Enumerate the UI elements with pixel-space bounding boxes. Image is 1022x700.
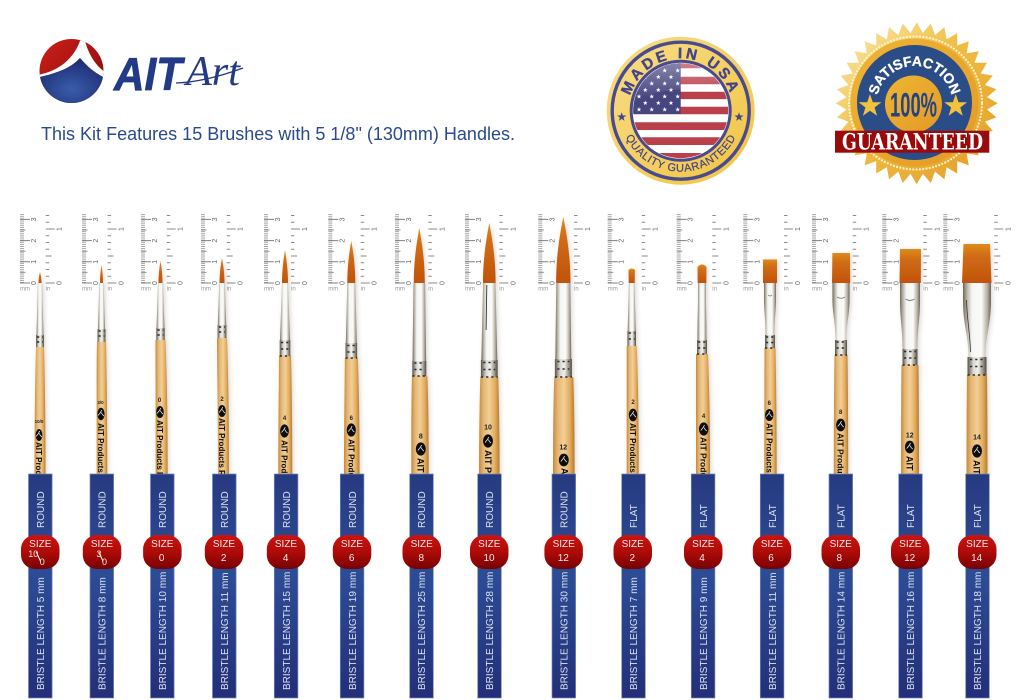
ruler 5: 10 bbox=[302, 227, 309, 285]
brush: flat 12: 12 bbox=[906, 432, 914, 440]
label strip 10: FLAT bbox=[629, 504, 640, 528]
label strip 13: FLAT bbox=[836, 504, 848, 528]
label strip 9: BRISTLE LENGTH 30 mm bbox=[560, 572, 570, 690]
label strip 1: BRISTLE LENGTH 5 mm bbox=[36, 577, 47, 690]
ruler 1: 10 bbox=[57, 227, 64, 285]
brush: round 10: 10 bbox=[484, 424, 492, 432]
label strip 13: 8 bbox=[837, 553, 843, 564]
label strip 1: 0 bbox=[40, 557, 45, 567]
badge text: 100%: 100% bbox=[890, 86, 937, 124]
ruler 3: 10 bbox=[178, 227, 185, 285]
badge text: guaranteed: GUARANTEED bbox=[842, 130, 983, 156]
brush: round 10: AIT Products Round bbox=[483, 450, 493, 537]
label strip 6: ROUND bbox=[348, 491, 359, 528]
ruler 4 bbox=[201, 213, 245, 292]
ruler 2: mm bbox=[82, 286, 92, 292]
brush: flat 14: 14 bbox=[973, 434, 981, 442]
ruler 9: 10 bbox=[585, 227, 592, 285]
label strip 11: BRISTLE LENGTH 9 mm bbox=[699, 577, 710, 690]
label strip 12: 6 bbox=[768, 553, 774, 564]
brush: flat 4: AIT Products Flat bbox=[698, 437, 708, 508]
label strip 6: 6 bbox=[349, 553, 355, 564]
ruler 10 bbox=[608, 213, 660, 292]
ruler 11: 3210 bbox=[688, 217, 695, 285]
label strip 2: SIZE bbox=[91, 539, 113, 550]
ruler 15: 10 bbox=[1005, 227, 1012, 285]
ruler 14: in bbox=[923, 286, 928, 292]
label strip 5: 4 bbox=[283, 553, 289, 564]
logo mark bbox=[40, 39, 104, 103]
label strip 8: 10 bbox=[483, 553, 495, 564]
ruler 4: 3210 bbox=[212, 217, 219, 285]
label strip 7: ROUND bbox=[417, 491, 428, 528]
brush: round 4 bbox=[278, 250, 292, 517]
label strip 3 bbox=[143, 474, 182, 698]
label strip 7: 8 bbox=[419, 553, 425, 564]
brush: round 10/0 bbox=[34, 272, 46, 519]
brush: flat 4: 4 bbox=[702, 414, 706, 420]
brush: flat 6: AIT Products Flat bbox=[764, 423, 773, 490]
ruler 1: mm bbox=[20, 286, 30, 292]
brush: round 3/0: AIT Products Round bbox=[96, 423, 105, 500]
brush: flat 8: AIT Products Flat bbox=[836, 433, 846, 504]
label strip 4 bbox=[205, 474, 243, 698]
ruler 12: mm bbox=[743, 286, 753, 292]
ruler 14: mm bbox=[882, 286, 892, 292]
label strip 8: SIZE bbox=[478, 539, 501, 550]
brush: flat 12 bbox=[900, 249, 921, 531]
ruler 12: in bbox=[784, 286, 789, 292]
label strip 12: FLAT bbox=[768, 504, 779, 528]
label strip 11 bbox=[684, 474, 722, 698]
label strip 1 bbox=[21, 474, 60, 698]
ruler 6: 10 bbox=[372, 227, 379, 285]
ruler 10: 3210 bbox=[619, 217, 626, 285]
label strip 2: / bbox=[94, 549, 108, 564]
label strip 4: SIZE bbox=[213, 539, 235, 550]
label strip 3: SIZE bbox=[151, 539, 174, 550]
brush: round 12: 12 bbox=[559, 444, 567, 452]
label strip 14: BRISTLE LENGTH 16 mm bbox=[906, 572, 917, 690]
ruler 11: mm bbox=[677, 286, 687, 292]
label strip 15: SIZE bbox=[966, 539, 989, 550]
label strip 3: 0 bbox=[159, 553, 165, 564]
label strip 10: SIZE bbox=[622, 539, 644, 550]
label strip 10: BRISTLE LENGTH 7 mm bbox=[629, 577, 640, 690]
ruler 11: in bbox=[712, 286, 717, 292]
ruler 8: 10 bbox=[510, 227, 517, 285]
ruler 12: 10 bbox=[795, 227, 802, 285]
ruler 7: 10 bbox=[439, 227, 446, 285]
ruler 7: in bbox=[428, 286, 433, 292]
brush: round 10/0: 10/0 bbox=[35, 419, 44, 424]
brush: flat 2: AIT Products Flat bbox=[628, 423, 637, 490]
ruler 1 bbox=[20, 213, 64, 292]
label strip 6: BRISTLE LENGTH 19 mm bbox=[348, 572, 359, 690]
ruler 6 bbox=[328, 213, 379, 292]
ruler 14 bbox=[882, 213, 941, 292]
ruler 10: in bbox=[642, 286, 646, 292]
brush: round 6 bbox=[344, 241, 360, 516]
brush: flat 12: AIT Products Flat bbox=[904, 456, 914, 531]
ruler 3: mm bbox=[141, 286, 151, 292]
ruler 8: mm bbox=[465, 286, 475, 292]
label strip 3: ROUND bbox=[158, 491, 169, 528]
label strip 1: 10 bbox=[28, 549, 38, 559]
ruler 14: 10 bbox=[934, 227, 941, 285]
label strip 9: ROUND bbox=[560, 491, 570, 528]
brush: round 6: 6 bbox=[350, 416, 354, 422]
ruler 8 bbox=[465, 213, 517, 292]
label strip 5: ROUND bbox=[282, 491, 293, 528]
label strip 9: SIZE bbox=[553, 539, 575, 550]
label strip 8: ROUND bbox=[485, 491, 496, 528]
ruler 1: in bbox=[46, 286, 50, 292]
label strip 9 bbox=[544, 474, 583, 698]
ruler 13: in bbox=[853, 286, 857, 292]
brush: round 0: AIT Products Round bbox=[155, 420, 164, 497]
ruler 5: in bbox=[291, 286, 296, 292]
ruler 5: mm bbox=[264, 286, 274, 292]
logo swoosh bbox=[176, 68, 243, 83]
label strip 15: BRISTLE LENGTH 18 mm bbox=[973, 572, 984, 690]
label strip 12: SIZE bbox=[761, 539, 783, 550]
label strip 9: 12 bbox=[558, 553, 569, 564]
label strip 7 bbox=[402, 474, 441, 698]
label strip 6 bbox=[333, 474, 371, 698]
badge text: made in USA: MADE IN USA bbox=[620, 48, 738, 95]
tagline: This Kit Features 15 Brushes with 5 1/8" (130mm) Handles. bbox=[41, 124, 515, 144]
brush: round 2 bbox=[217, 258, 229, 495]
brush: flat 4 bbox=[696, 264, 710, 508]
ruler 12 bbox=[743, 213, 802, 292]
brush: round 6: AIT Products Round bbox=[346, 439, 355, 516]
brush: round 2: AIT Products Round bbox=[217, 418, 226, 495]
brush: round 3/0: 3/0 bbox=[97, 400, 104, 405]
brush: flat 14 bbox=[962, 244, 992, 535]
ruler 2 bbox=[82, 213, 126, 292]
ruler 6: 3210 bbox=[339, 217, 346, 285]
ruler 6: in bbox=[361, 286, 365, 292]
label strip 2: ROUND bbox=[98, 491, 109, 528]
brush: round 8: 8 bbox=[419, 434, 423, 440]
label strip 11: FLAT bbox=[699, 504, 710, 528]
logo wordmark AIT: AIT bbox=[113, 48, 186, 100]
label strip 6: SIZE bbox=[341, 539, 363, 550]
brush: round 4: 4 bbox=[283, 416, 287, 422]
label strip 1: / bbox=[32, 549, 45, 564]
ruler 2: in bbox=[108, 286, 112, 292]
ruler 2: 10 bbox=[118, 227, 126, 285]
ruler 9: mm bbox=[538, 286, 548, 292]
label strip 2 bbox=[83, 474, 121, 698]
brush: flat 2 bbox=[627, 268, 639, 490]
ruler 9 bbox=[538, 213, 592, 292]
ruler 1: 3210 bbox=[31, 217, 38, 285]
ruler 13: 10 bbox=[864, 227, 871, 285]
brush: flat 8 bbox=[832, 253, 850, 504]
brush: flat 2: 2 bbox=[631, 400, 635, 406]
ruler 15: 3210 bbox=[954, 217, 961, 285]
brush: round 12 bbox=[553, 217, 575, 555]
ruler 13: mm bbox=[812, 286, 822, 292]
label strip 7: BRISTLE LENGTH 25 mm bbox=[417, 572, 428, 690]
label strip 14 bbox=[891, 474, 930, 698]
label strip 3: BRISTLE LENGTH 10 mm bbox=[158, 572, 169, 690]
label strip 14: SIZE bbox=[899, 539, 922, 550]
ruler 10: 10 bbox=[653, 227, 660, 285]
ruler 3: 3210 bbox=[152, 217, 159, 285]
ruler 15: mm bbox=[943, 286, 953, 292]
brush: round 10/0: AIT Products Round bbox=[34, 442, 43, 519]
brush: flat 8: 8 bbox=[839, 410, 843, 416]
brush: round 0 bbox=[155, 261, 168, 497]
label strip 15: 14 bbox=[971, 553, 983, 564]
brush: round 8: AIT Products Round bbox=[415, 458, 425, 545]
ruler 13 bbox=[812, 213, 871, 292]
label strip 5 bbox=[267, 474, 305, 698]
label strip 15: FLAT bbox=[973, 504, 984, 528]
brush: round 2: 2 bbox=[220, 397, 224, 403]
ruler 3: in bbox=[167, 286, 171, 292]
ruler 15 bbox=[943, 213, 1012, 292]
label strip 4: ROUND bbox=[220, 491, 231, 528]
brush: flat 14: AIT Products Flat bbox=[972, 460, 982, 535]
brush: round 12: AIT Products Round bbox=[559, 468, 569, 555]
label strip 5: SIZE bbox=[275, 539, 297, 550]
label strip 4: BRISTLE LENGTH 11 mm bbox=[220, 572, 231, 690]
label strip 10: 2 bbox=[630, 553, 636, 564]
logo script Art: Art bbox=[183, 49, 241, 95]
label strip 1: SIZE bbox=[29, 539, 52, 550]
label strip 10 bbox=[614, 474, 652, 698]
ruler 7: 3210 bbox=[406, 217, 413, 285]
brush: round 10 bbox=[479, 223, 500, 537]
brush: round 3/0 bbox=[96, 265, 107, 500]
ruler 6: mm bbox=[328, 286, 338, 292]
label strip 2: BRISTLE LENGTH 8 mm bbox=[98, 577, 109, 690]
ruler 7: mm bbox=[395, 286, 405, 292]
ruler 8: 3210 bbox=[476, 217, 483, 285]
ruler 7 bbox=[395, 213, 446, 292]
label strip 12: BRISTLE LENGTH 11 mm bbox=[768, 572, 779, 690]
label strip 2: 3 bbox=[96, 549, 102, 559]
badge: satisfaction guaranteed bbox=[835, 22, 998, 184]
badge: made in USA bbox=[606, 36, 755, 185]
ruler 4: in bbox=[227, 286, 231, 292]
flag bbox=[632, 62, 730, 161]
AIT Art logo bbox=[38, 37, 243, 106]
ruler 5 bbox=[264, 213, 309, 292]
label strip 5: BRISTLE LENGTH 15 mm bbox=[282, 572, 293, 690]
badge text: satisfaction: SATISFACTION bbox=[869, 56, 961, 94]
ruler 5: 3210 bbox=[275, 217, 282, 285]
ruler 8: in bbox=[499, 286, 504, 292]
label strip 13: SIZE bbox=[830, 539, 852, 550]
label strip 14: FLAT bbox=[906, 504, 917, 528]
label strip 7: SIZE bbox=[411, 539, 433, 550]
ruler 12: 3210 bbox=[754, 217, 761, 285]
ruler 11: 10 bbox=[723, 227, 730, 285]
label strip 4: 2 bbox=[221, 553, 227, 564]
label strip 12 bbox=[753, 474, 791, 698]
ruler 13: 3210 bbox=[823, 217, 830, 285]
brush: round 8 bbox=[411, 228, 429, 545]
ruler 2: 3210 bbox=[93, 217, 100, 285]
ruler 11 bbox=[677, 213, 730, 292]
label strip 13 bbox=[822, 474, 860, 698]
label strip 11: SIZE bbox=[692, 539, 715, 550]
ruler 4: mm bbox=[201, 286, 211, 292]
ruler 14: 3210 bbox=[893, 217, 900, 285]
ruler 10: mm bbox=[608, 286, 618, 292]
ruler 3 bbox=[141, 213, 185, 292]
badge text: quality guaranteed: QUALITY GUARANTEED bbox=[626, 134, 734, 172]
label strip 13: BRISTLE LENGTH 14 mm bbox=[836, 572, 848, 690]
ruler 9: in bbox=[574, 286, 579, 292]
brush: round 0: 0 bbox=[158, 398, 162, 404]
ruler 4: 10 bbox=[238, 227, 245, 285]
label strip 14: 12 bbox=[904, 553, 916, 564]
label strip 8 bbox=[470, 474, 508, 698]
ruler 15: in bbox=[994, 286, 999, 292]
brush: flat 6 bbox=[763, 260, 777, 490]
label strip 8: BRISTLE LENGTH 28 mm bbox=[485, 572, 496, 690]
label strip 11: 4 bbox=[699, 553, 705, 564]
brush: flat 6: 6 bbox=[768, 401, 772, 407]
label strip 1: ROUND bbox=[36, 491, 47, 528]
label strip 15 bbox=[958, 474, 996, 698]
brush: round 4: AIT Products Round bbox=[280, 440, 288, 517]
ruler 9: 3210 bbox=[549, 217, 556, 285]
label strip 2: 0 bbox=[102, 557, 107, 567]
